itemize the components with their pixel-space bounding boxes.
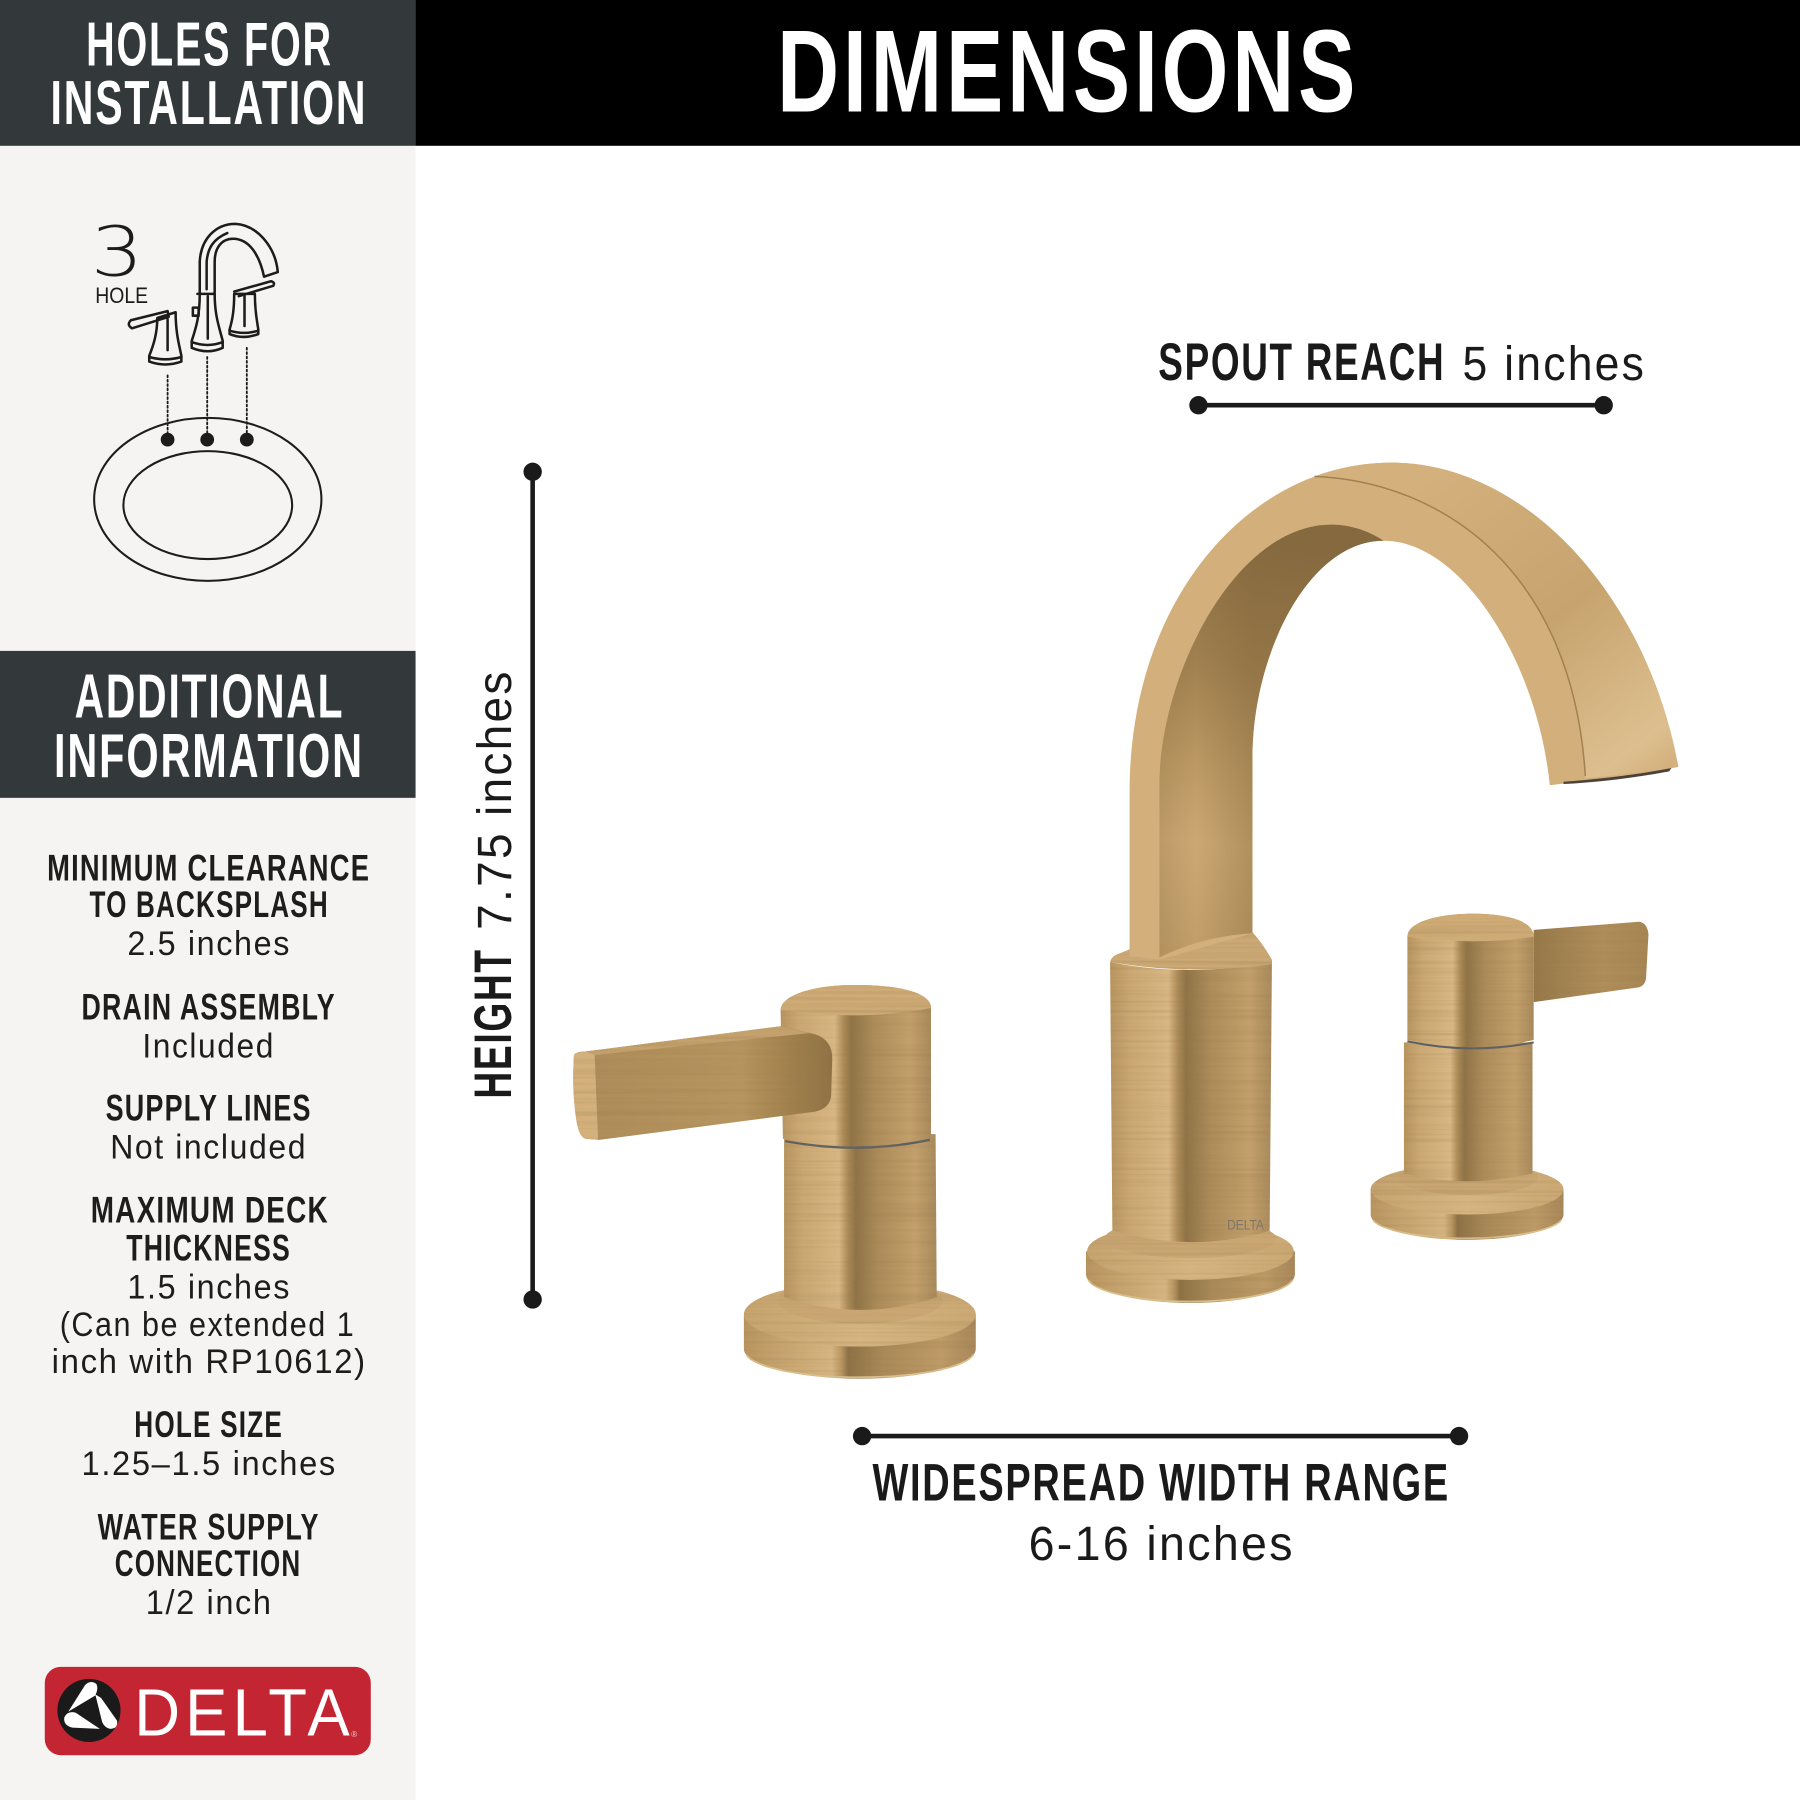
heading: additional information: INFORMATION [54,722,364,791]
heading: holes for installation: INSTALLATION [51,69,367,138]
dimension: spout reach: SPOUT REACH [1158,333,1445,392]
spec: water supply connection: 1/2 inch [146,1584,273,1622]
panel: left sidebar [0,0,416,1800]
faucet: right handle [1371,914,1648,1240]
dotted guide lines [168,348,247,434]
text block: specifications list [47,847,370,1622]
spec: maximum deck thickness: (Can be extended 1 [60,1306,355,1344]
spec: water supply connection: CONNECTION [115,1543,301,1584]
icon: mini right handle [230,281,274,337]
icon: mini left handle [129,311,181,364]
icon: sink basin [94,418,321,581]
text: delta stamp: DELTA [1227,1217,1265,1232]
spec: maximum deck thickness: 1.5 inches [127,1268,291,1306]
dimension: widespread width range: 6-16 inches [1029,1517,1295,1571]
spec: maximum deck thickness: THICKNESS [126,1227,291,1268]
number: 3 hole: 3 [91,213,143,293]
spec: water supply connection [98,1506,320,1622]
spec: maximum deck thickness: MAXIMUM DECK [91,1190,329,1231]
dimension: spout reach [1158,333,1646,414]
spec: maximum deck thickness: inch with RP10612) [52,1343,367,1381]
number: 3 hole [91,213,148,308]
spec: supply lines: SUPPLY LINES [106,1087,312,1128]
spec: drain assembly [82,986,336,1065]
spec: drain assembly: DRAIN ASSEMBLY [82,986,336,1027]
heading: additional information: ADDITIONAL [75,662,344,731]
dimension: height [464,463,542,1309]
faucet: left handle [573,985,976,1379]
dimension: height: 7.75 inches [468,669,522,930]
heading bar: dimensions [416,0,1800,146]
heading: holes for installation [0,0,416,146]
spec: drain assembly: Included [142,1027,275,1065]
spec: hole size [82,1404,337,1483]
dimension: widespread width range [853,1427,1468,1571]
heading: holes for installation: HOLES FOR [86,10,333,79]
dimension: spout reach: 5 inches [1463,337,1646,391]
faucet: spout [1130,463,1678,960]
spec: hole size: 1.25–1.5 inches [82,1445,337,1483]
icon: three-hole faucet and sink diagram [91,213,321,581]
logo: delta [45,1667,371,1755]
icon: mini spout [192,224,278,351]
spec: hole size: HOLE SIZE [134,1404,283,1445]
dimension: widespread width range: WIDESPREAD WIDTH RANGE [872,1453,1450,1512]
spec: water supply connection: WATER SUPPLY [98,1506,320,1547]
spec: minimum clearance: MINIMUM CLEARANCE [47,847,370,888]
spec: minimum clearance [47,847,370,963]
spec: supply lines [106,1087,312,1166]
logo: delta: ® [351,1730,358,1739]
product image: gold faucet [573,463,1678,1379]
number: 3 hole: HOLE [95,283,148,308]
spec: minimum clearance: 2.5 inches [127,925,291,963]
logo: delta: DELTA [134,1677,355,1751]
heading: additional information [0,651,416,798]
faucet: center base and column [1086,932,1295,1303]
spec: supply lines: Not included [110,1128,307,1166]
icon: mounting holes [161,433,254,447]
dimension: height: HEIGHT [464,948,523,1099]
title: dimensions: DIMENSIONS [777,5,1359,136]
spec: maximum deck thickness [52,1190,367,1381]
spec: minimum clearance: TO BACKSPLASH [90,884,329,925]
